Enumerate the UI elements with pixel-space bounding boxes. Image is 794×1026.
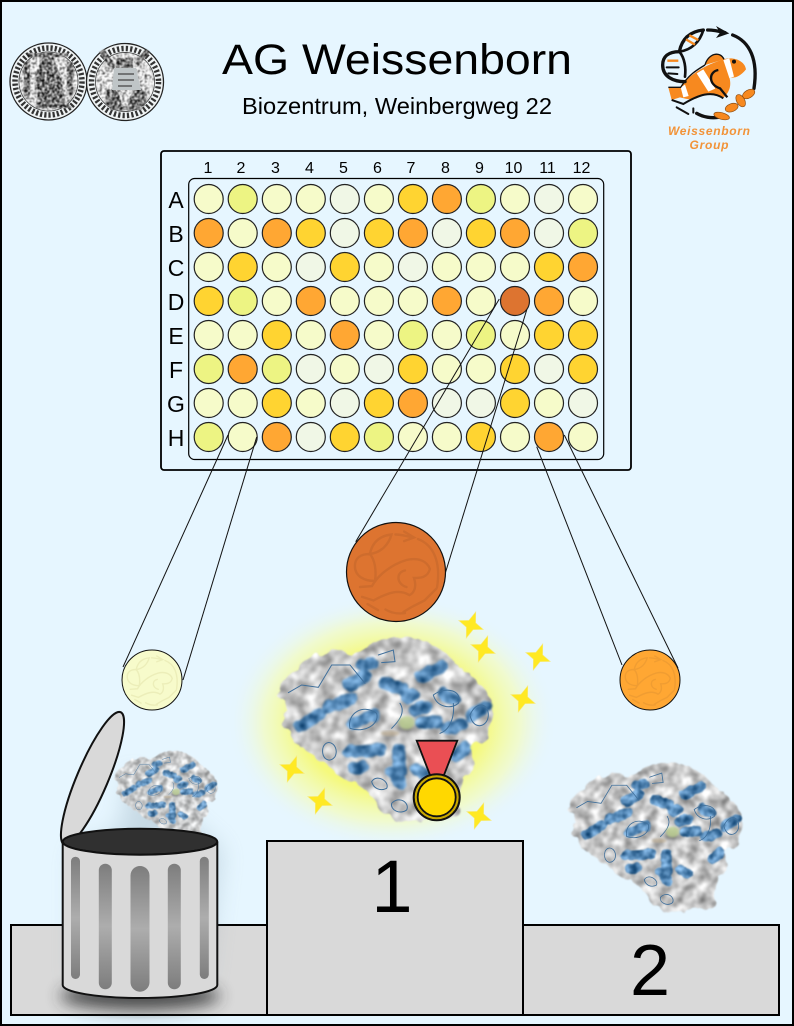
plate column numbers: 5 [339,160,348,177]
trash can body [63,829,217,998]
plate row letters: F [169,357,183,383]
plate wells heat map [194,184,597,452]
subtitle: Biozentrum, Weinbergweg 22 [242,93,552,119]
plate column numbers: 1 [204,160,213,177]
logo: Weissenborn group [663,26,756,152]
protein: discarded [115,752,217,839]
icon: university seal left [10,43,87,120]
plate column numbers: 9 [475,160,484,177]
plate column numbers: 7 [407,160,416,177]
zoom lines: well H11 to orange coin [537,435,678,668]
plate row letters: H [168,425,184,451]
plate column numbers: 10 [505,160,522,177]
zoom lines: well D10 to dark coin [356,299,527,573]
logo: Weissenborn group: Group [690,138,728,152]
plate column numbers: 4 [305,160,314,177]
sparkle stars [275,607,555,834]
plate column numbers: 3 [271,160,280,177]
plate column numbers: 11 [539,160,556,177]
plate column numbers: 8 [441,160,450,177]
coin: pale well [122,650,182,710]
glow behind winning protein [227,594,557,850]
podium: place 1 [267,841,523,1015]
logo: Weissenborn group: Weissenborn [668,124,750,138]
coin: dark orange well [346,522,446,622]
plate column numbers [204,160,590,177]
plate row letters: B [168,221,184,247]
podium: place 2 [523,925,779,1015]
plate row letters: G [167,391,185,417]
plate row letters: C [168,255,184,281]
trash can [50,706,222,1010]
zoom lines: well H2 to pale coin [123,435,257,680]
podium: place 3 [11,925,267,1015]
podium: place 2: 2 [630,931,670,1011]
plate column numbers: 6 [373,160,382,177]
protein: runner-up [569,764,743,912]
protein: winner [279,639,493,821]
podium: place 1: 1 [371,845,413,928]
plate column numbers: 2 [237,160,246,177]
title: AG Weissenborn [222,36,572,84]
plate row letters: E [168,323,184,349]
medal [414,741,460,820]
trash can lid [50,706,135,851]
plate row letters [167,187,185,451]
panel: 96-well plate [161,151,631,470]
plate row letters: D [168,289,184,315]
plate column numbers: 12 [573,160,590,177]
icon: university seal right [86,44,164,120]
plate row letters: A [168,187,184,213]
coin: orange well [620,650,680,710]
